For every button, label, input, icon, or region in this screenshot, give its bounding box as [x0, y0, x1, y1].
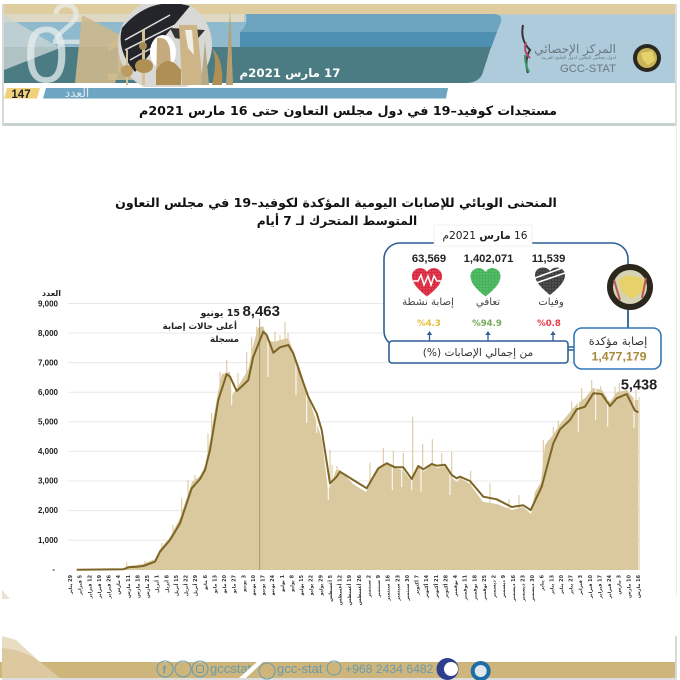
y axis: -	[52, 565, 55, 574]
stat: active cases: 63,569	[412, 253, 446, 265]
x axis date labels: 7 أكتوبر	[414, 574, 420, 596]
confirmed cases box: 1,477,179	[591, 350, 647, 364]
y axis: 5,000	[38, 418, 59, 426]
x axis date labels: 23 ديسمبر	[520, 574, 526, 602]
x axis date labels: 19 فبراير	[97, 574, 103, 599]
x axis date labels: 29 أبريل	[192, 574, 199, 596]
social handles: f	[162, 664, 166, 676]
x axis date labels: 2 ديسمبر	[492, 575, 498, 599]
x axis date labels: 22 يوليو	[309, 575, 315, 596]
x axis date labels: 20 مايو	[222, 574, 228, 594]
x axis date labels: 6 مايو	[203, 574, 209, 591]
chart title	[115, 195, 557, 229]
x axis date labels: 18 نوفمبر	[472, 574, 478, 601]
date label: 16 مارس 2021م	[442, 230, 528, 242]
peak callout: 15 يونيو	[200, 308, 240, 319]
x axis date labels: 16 مارس	[636, 574, 642, 598]
x axis date labels: 3 يونيو	[241, 574, 247, 593]
y axis: 1,000	[38, 536, 59, 545]
y axis: 3,000	[38, 476, 59, 486]
y axis: 9,000	[38, 300, 59, 308]
x axis date labels: 23 سبتمبر	[395, 574, 401, 602]
x axis date labels: 9 ديسمبر	[501, 574, 507, 599]
x axis date labels: 25 مارس	[145, 574, 151, 598]
header banner: 1	[104, 26, 137, 93]
x axis date labels: 10 مارس	[626, 574, 632, 598]
x axis date labels: 24 يونيو	[270, 574, 276, 596]
stat: deaths: وفيات	[538, 297, 564, 308]
y axis	[38, 289, 61, 574]
social handles: +968 2434 6482	[345, 662, 434, 676]
x axis date labels: 15 يوليو	[299, 574, 305, 596]
x axis date labels: 4 نوفمبر	[453, 574, 459, 598]
x axis date labels: 29 يوليو	[318, 574, 324, 596]
share note box	[389, 341, 568, 363]
x axis date labels: 8 يوليو	[289, 574, 295, 593]
stat: recovered: تعافي	[476, 297, 500, 308]
peak callout: مسجلة	[210, 335, 239, 345]
x axis date labels: 3 مارس	[617, 574, 623, 595]
issue number tag: 147	[11, 89, 31, 101]
footer	[0, 636, 677, 680]
stat: deaths: %0.8	[537, 319, 561, 329]
x axis date labels: 22 أبريل	[182, 575, 190, 596]
x axis date labels: 2 سبتمبر	[366, 575, 372, 598]
x axis date labels: 16 سبتمبر	[386, 574, 392, 602]
x axis date labels: 30 ديسمبر	[530, 574, 536, 602]
x axis date labels: 12 أغسطس	[336, 575, 344, 605]
date: 17 مارس 2021م	[240, 66, 340, 81]
chart title: المنحنى الوبائي للإصابات اليومية المؤكدة لكوفيد–19 في مجلس التعاون	[115, 195, 557, 210]
y axis: 2,000	[38, 506, 59, 515]
GCC-STAT logo: GCC-STAT	[560, 63, 616, 75]
x axis date labels: 30 سبتمبر	[405, 574, 411, 602]
x axis date labels: 20 يناير	[559, 574, 565, 595]
y axis: 7,000	[38, 358, 59, 368]
x axis date labels: 17 فبراير	[597, 574, 603, 599]
summary panel	[384, 225, 661, 369]
x axis date labels: 9 سبتمبر	[376, 574, 382, 598]
x axis date labels: 17 يونيو	[260, 574, 266, 596]
x axis date labels: 10 يونيو	[251, 574, 257, 596]
share note box: من إجمالي الإصابات (%)	[423, 347, 533, 359]
header banner	[4, 4, 675, 87]
latest value label: 5,438	[621, 378, 657, 394]
y axis: العدد	[42, 289, 61, 298]
stat: active cases: إصابة نشطة	[402, 297, 454, 308]
x axis date labels: 4 مارس	[116, 574, 122, 595]
GCC-STAT logo: المركز الإحصائي	[534, 42, 616, 57]
watermark numerals: 0	[24, 10, 68, 99]
x axis date labels: 11 مارس	[126, 574, 132, 598]
x axis date labels: 15 أبريل	[173, 574, 180, 596]
stat: recovered	[464, 253, 513, 329]
report title: مستجدات كوفيد–19 في دول مجلس التعاون حتى 16 مارس 2021م	[139, 103, 557, 119]
x axis date labels: 13 يناير	[549, 574, 555, 595]
x axis date labels: 11 نوفمبر	[463, 574, 469, 601]
date label	[434, 225, 532, 246]
globe	[118, 0, 212, 92]
y axis: 6,000	[38, 388, 59, 397]
stat: recovered: %94.9	[472, 319, 502, 329]
x axis date labels: 1 يوليو	[280, 574, 286, 593]
GCC-STAT logo: لدول مجلس التعاون لدول الخليج العربية	[541, 56, 616, 61]
GCC emblem	[607, 264, 653, 310]
issue strip: العدد	[65, 86, 89, 100]
social handles	[162, 661, 434, 676]
x axis date labels: 10 فبراير	[588, 574, 594, 599]
social handles: gcc-stat	[277, 661, 323, 676]
x axis date labels: 27 مايو	[232, 574, 238, 594]
peak callout: أعلى حالات إصابة	[163, 320, 237, 332]
arrows	[427, 331, 556, 341]
x axis date labels: 27 يناير	[568, 574, 574, 595]
social handles: gccstat	[210, 661, 252, 676]
x axis date labels: 26 أغسطس	[356, 574, 363, 605]
peak callout: 8,463	[242, 303, 280, 320]
stat: active cases: %4.3	[417, 319, 441, 329]
x axis date labels: 24 فبراير	[607, 574, 613, 599]
x axis date labels: 14 أكتوبر	[423, 574, 430, 599]
peak callout	[163, 303, 280, 345]
seven day moving average line	[77, 332, 638, 570]
x axis date labels: 5 أغسطس	[327, 574, 334, 602]
chart title: المتوسط المتحرك لـ 7 أيام	[257, 213, 417, 229]
x axis date labels: 8 أبريل	[163, 574, 170, 593]
x axis date labels: 28 أكتوبر	[442, 574, 449, 599]
x axis date labels: 12 فبراير	[87, 575, 93, 599]
x axis date labels: 29 يناير	[68, 574, 74, 595]
x axis date labels: 26 فبراير	[106, 574, 112, 599]
stat: active cases	[402, 253, 454, 329]
x axis date labels: 13 مايو	[212, 574, 218, 594]
issue number tag	[4, 88, 40, 101]
certification badges	[436, 658, 491, 680]
x axis date labels: 25 نوفمبر	[482, 574, 488, 601]
confirmed cases box	[574, 328, 661, 369]
x axis date labels: 21 أكتوبر	[433, 574, 440, 599]
x axis date labels	[68, 574, 642, 605]
y axis: 8,000	[38, 329, 59, 338]
x axis date labels: 3 فبراير	[578, 574, 584, 596]
header emblem	[633, 44, 661, 72]
peak marker line	[259, 319, 261, 570]
confirmed cases box: إصابة مؤكدة	[589, 334, 647, 349]
issue strip	[43, 86, 448, 100]
y axis: 4,000	[38, 447, 59, 456]
GCC-STAT logo	[522, 25, 616, 75]
social icons	[157, 661, 341, 679]
stat: recovered: 1,402,071	[464, 253, 513, 265]
x axis date labels: 5 فبراير	[78, 574, 84, 596]
x axis date labels: 6 يناير	[540, 574, 546, 592]
x axis date labels: 18 مارس	[135, 574, 141, 598]
stat: deaths	[532, 253, 565, 329]
x axis date labels: 16 ديسمبر	[511, 574, 517, 602]
x axis date labels: 1 أبريل	[154, 574, 161, 593]
x axis date labels: 19 أغسطس	[346, 574, 353, 605]
stat: deaths: 11,539	[532, 253, 565, 265]
chart: daily cases bars	[77, 322, 639, 570]
skyline	[121, 10, 233, 85]
